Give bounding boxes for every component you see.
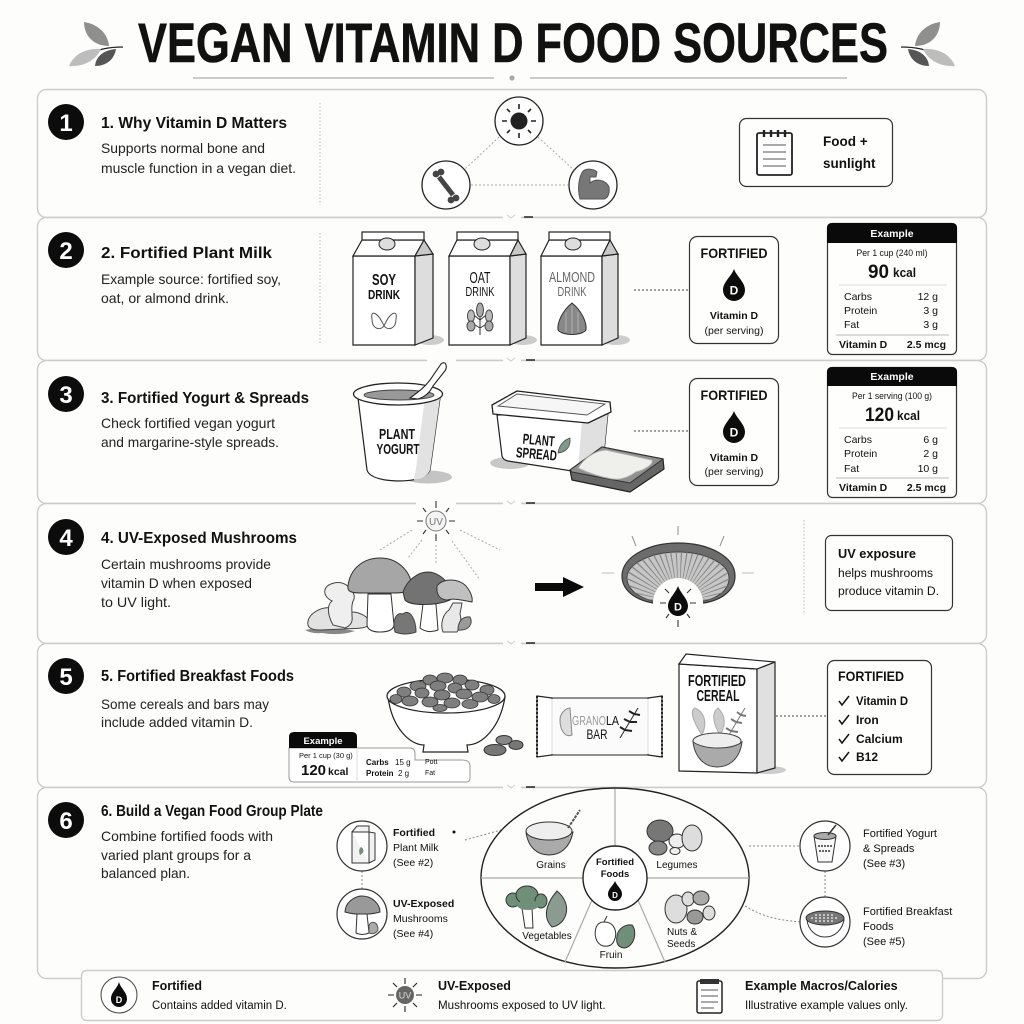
heading 1: 1. Why Vitamin D Matters [101, 115, 287, 132]
nutrition card: yogurt and spread example: Per 1 serving (100 g) [852, 391, 932, 402]
icon: UV sun with rays [380, 500, 500, 580]
linked item: plant milk: (See #2) [393, 857, 433, 869]
linked item: mushrooms: UV-Exposed [393, 898, 454, 910]
badge: fortified checklist: Iron [856, 713, 879, 727]
legend item: example macros [697, 979, 908, 1013]
nutrition card: plant milk example: Protein [844, 305, 877, 317]
food group: nuts and seeds: Nuts & [667, 927, 697, 938]
description 5: include added vitamin D. [101, 714, 253, 730]
badge: fortified: Vitamin D [710, 310, 759, 322]
linked item: breakfast foods [800, 897, 952, 948]
nutrition card: plant milk example: 12 g [918, 291, 938, 303]
arrow: exposed to result [535, 577, 584, 597]
badge: fortified: Vitamin D [710, 452, 759, 464]
illustration: plant yogurt cup [354, 363, 452, 484]
badge: fortified [690, 378, 778, 486]
description 4: vitamin D when exposed [101, 575, 252, 591]
linked item: yogurt and spreads [800, 821, 937, 871]
illustration: plant yogurt cup: PLANT [379, 426, 415, 443]
center hub: fortified foods: Foods [601, 869, 629, 880]
linked item: breakfast foods: Fortified Breakfast [863, 906, 952, 918]
linked item: plant milk [337, 821, 439, 871]
icon: right leaf sprig [901, 22, 955, 66]
nutrition card: breakfast example: Per 1 cup (30 g) [299, 751, 353, 760]
legend item: UV-exposed: Mushrooms exposed to UV light. [438, 999, 606, 1012]
description 2: oat, or almond drink. [101, 290, 229, 306]
nutrition card: yogurt and spread example: 2.5 mcg [907, 482, 946, 494]
carton: almond drink: DRINK [558, 284, 587, 299]
illustration: fortified cereal box: FORTIFIED [688, 673, 746, 690]
badge: fortified: FORTIFIED [700, 387, 768, 403]
illustration: cereal bowl [387, 673, 523, 756]
linked item: mushrooms [337, 889, 454, 940]
illustration: plant spread tub and toast: PLANT [522, 432, 555, 450]
nutrition card: breakfast example: Example [303, 736, 343, 747]
linked item: mushrooms: Mushrooms [393, 913, 448, 925]
linked item: yogurt and spreads: (See #3) [863, 858, 905, 870]
number badge 4 [48, 519, 84, 555]
panel: fortified plant milk [38, 218, 986, 360]
heading 2: 2. Fortified Plant Milk [101, 245, 272, 262]
legend item: fortified: Fortified [152, 979, 202, 993]
carton: almond drink [541, 232, 630, 345]
nutrition card: plant milk example: 3 g [923, 319, 938, 331]
panel: why vitamin D matters [38, 90, 986, 218]
linked item: plant milk: Fortified [393, 827, 435, 839]
legend item: UV-exposed: UV-Exposed [438, 979, 511, 993]
nutrition card: breakfast example: 2 g [398, 769, 409, 778]
food group: legumes: Legumes [656, 860, 698, 871]
nutrition card: yogurt and spread example: Protein [844, 448, 877, 460]
description 3 [101, 415, 279, 450]
illustration: mushroom cap with vitamin D drop [602, 526, 754, 632]
carton: oat drink [449, 232, 537, 345]
nutrition card: plant milk example: kcal [893, 265, 916, 280]
diagram: sun, bone and muscle triangle [422, 97, 617, 209]
nutrition card: yogurt and spread example: 120 [865, 405, 894, 426]
description 1 [101, 140, 296, 176]
description 5: Some cereals and bars may [101, 696, 269, 712]
callout: food + sunlight: Food + [823, 134, 868, 149]
food group: grains [526, 810, 580, 871]
description 4: Certain mushrooms provide [101, 556, 271, 572]
description 6 [101, 828, 273, 881]
illustration: plant spread tub and toast: SPREAD [515, 445, 558, 465]
badge: fortified: FORTIFIED [700, 245, 768, 261]
icon: vitamin D drop: D [730, 426, 739, 440]
illustration: fortified cereal box [679, 654, 786, 774]
icon: UV sun with rays: UV [429, 517, 443, 528]
legend item: fortified: D [116, 995, 123, 1005]
nutrition card: plant milk example: Vitamin D [839, 339, 888, 351]
nutrition card: plant milk example: 3 g [923, 305, 938, 317]
legend item: UV-exposed [388, 978, 606, 1012]
description 6: balanced plan. [101, 865, 190, 881]
illustration: granola bar [537, 696, 662, 757]
nutrition card: plant milk example: Example [870, 228, 914, 240]
illustration: plant yogurt cup: YOGURT [376, 441, 420, 458]
center hub: fortified foods: Fortified [596, 857, 634, 868]
nutrition card: breakfast example: Protein [366, 769, 394, 778]
carton: soy drink: SOY [372, 272, 396, 289]
food group: legumes [647, 820, 702, 871]
title underline [193, 75, 847, 81]
nutrition card: yogurt and spread example: Carbs [844, 434, 872, 446]
carton: oat drink: DRINK [466, 285, 495, 299]
number badge 2 [48, 232, 84, 268]
nutrition card: plant milk example: Per 1 cup (240 ml) [856, 248, 928, 259]
legend item: example macros: Example Macros/Calories [745, 979, 898, 993]
center hub: fortified foods: D [612, 891, 618, 900]
description 1: muscle function in a vegan diet. [101, 160, 296, 176]
icon: left leaf sprig [69, 22, 123, 66]
icon: bone [422, 161, 470, 209]
food group: nuts and seeds: Seeds [667, 939, 695, 950]
food group: nuts and seeds [665, 891, 715, 950]
icon: vitamin D drop [668, 586, 688, 616]
heading 3: 3. Fortified Yogurt & Spreads [101, 390, 309, 407]
section connectors [503, 215, 535, 788]
nutrition card: breakfast example: Fat [425, 770, 435, 777]
description 1: Supports normal bone and [101, 140, 265, 156]
panel: UV-exposed mushrooms [38, 500, 986, 644]
nutrition card: plant milk example: 2.5 mcg [907, 339, 946, 351]
badge: fortified checklist: Vitamin D [856, 694, 908, 708]
nutrition card: yogurt and spread example: Fat [844, 463, 859, 475]
carton: oat drink: OAT [470, 270, 491, 287]
nutrition card: breakfast example: Pott [425, 759, 438, 766]
description 2: Example source: fortified soy, [101, 271, 281, 287]
food group: fruit: Fruin [600, 950, 622, 961]
linked item: mushrooms: (See #4) [393, 928, 433, 940]
panel: fortified breakfast foods [38, 644, 986, 788]
illustration: granola bar: BAR [586, 726, 608, 742]
description 4 [101, 556, 271, 610]
illustration: fortified cereal box: CEREAL [696, 688, 740, 705]
callout: UV exposure: UV exposure [838, 546, 916, 561]
illustration: granola bar: GRANO [572, 713, 606, 728]
number badge 5 [48, 658, 84, 694]
callout: UV exposure: produce vitamin D. [838, 586, 939, 598]
nutrition card: yogurt and spread example: 2 g [923, 448, 938, 460]
number badge 1: 1 [59, 110, 73, 137]
center hub: fortified foods [583, 846, 647, 910]
illustration: plant spread tub and toast [490, 391, 664, 492]
description 3: Check fortified vegan yogurt [101, 415, 275, 431]
legend item: example macros: Illustrative example values only. [745, 999, 908, 1012]
number badge 6: 6 [59, 808, 73, 835]
number badge 2: 2 [59, 238, 73, 265]
nutrition card: yogurt and spread example [827, 367, 957, 498]
callout: food + sunlight: sunlight [823, 156, 876, 171]
callout: UV exposure [826, 536, 952, 610]
nutrition card: plant milk example: Fat [844, 319, 859, 331]
panel: build a vegan food group plate [38, 788, 986, 978]
legend item: fortified [101, 977, 287, 1013]
nutrition card: yogurt and spread example: 6 g [923, 434, 938, 446]
number badge 5: 5 [59, 664, 73, 691]
carton: soy drink: DRINK [368, 287, 400, 302]
food group: vegetables: Vegetables [522, 931, 572, 942]
callout: UV exposure: helps mushrooms [838, 568, 933, 580]
linked item: breakfast foods: Foods [863, 921, 894, 933]
description 2 [101, 271, 281, 306]
badge: fortified checklist: FORTIFIED [838, 668, 904, 684]
description 3: and margarine-style spreads. [101, 434, 279, 450]
nutrition card: yogurt and spread example: Example [870, 371, 914, 383]
number badge 3: 3 [59, 382, 73, 409]
panel: fortified yogurt and spreads [38, 360, 986, 504]
icon: notepad [757, 130, 792, 175]
badge: fortified checklist: B12 [856, 750, 878, 764]
number badge 3 [48, 376, 84, 412]
icon: flexed muscle [569, 161, 617, 209]
description 6: Combine fortified foods with [101, 828, 273, 844]
badge: fortified checklist: Calcium [856, 732, 903, 746]
linked item: plant milk: Plant Milk [393, 842, 439, 854]
food group: vegetables [506, 886, 572, 942]
nutrition card: breakfast example: kcal [328, 766, 349, 778]
linked item: yogurt and spreads: & Spreads [863, 843, 915, 855]
carton: almond drink: ALMOND [549, 269, 595, 286]
nutrition card: plant milk example [827, 223, 957, 354]
nutrition card: yogurt and spread example: Vitamin D [839, 482, 888, 494]
legend item: UV-exposed: UV [399, 990, 411, 1000]
number badge 1 [48, 104, 84, 140]
carton: soy drink [353, 232, 444, 345]
linked item: yogurt and spreads: Fortified Yogurt [863, 828, 937, 840]
plate diagram [481, 788, 749, 968]
food group: grains: Grains [536, 860, 566, 871]
heading 5: 5. Fortified Breakfast Foods [101, 668, 294, 685]
heading 4: 4. UV-Exposed Mushrooms [101, 530, 297, 547]
nutrition card: breakfast example: Carbs [366, 758, 389, 767]
nutrition card: breakfast example [289, 732, 470, 782]
nutrition card: plant milk example: 90 [868, 262, 889, 283]
description 4: to UV light. [101, 594, 171, 610]
nutrition card: breakfast example: 15 g [395, 758, 411, 767]
icon: vitamin D drop: D [674, 602, 682, 614]
callout: food + sunlight [740, 118, 892, 186]
number badge 6 [48, 802, 84, 838]
legend [82, 970, 942, 1020]
description 5 [101, 696, 269, 730]
number badge 4: 4 [59, 525, 73, 552]
legend item: fortified: Contains added vitamin D. [152, 1000, 287, 1012]
nutrition card: breakfast example: 120 [301, 762, 326, 779]
illustration: granola bar: LA [606, 713, 619, 728]
linked item: breakfast foods: (See #5) [863, 936, 905, 948]
badge: fortified [690, 236, 778, 344]
nutrition card: yogurt and spread example: 10 g [918, 463, 938, 475]
icon: vitamin D drop: D [730, 284, 739, 298]
nutrition card: yogurt and spread example: kcal [897, 408, 920, 423]
illustration: mushroom cluster [305, 558, 472, 634]
icon: sun [495, 97, 543, 145]
badge: fortified: (per serving) [705, 466, 763, 478]
badge: fortified: (per serving) [705, 325, 763, 337]
heading 6: 6. Build a Vegan Food Group Plate [101, 803, 323, 820]
nutrition card: plant milk example: Carbs [844, 291, 872, 303]
description 6: varied plant groups for a [101, 847, 251, 863]
badge: fortified checklist [828, 660, 932, 774]
food group: fruit [595, 916, 635, 961]
